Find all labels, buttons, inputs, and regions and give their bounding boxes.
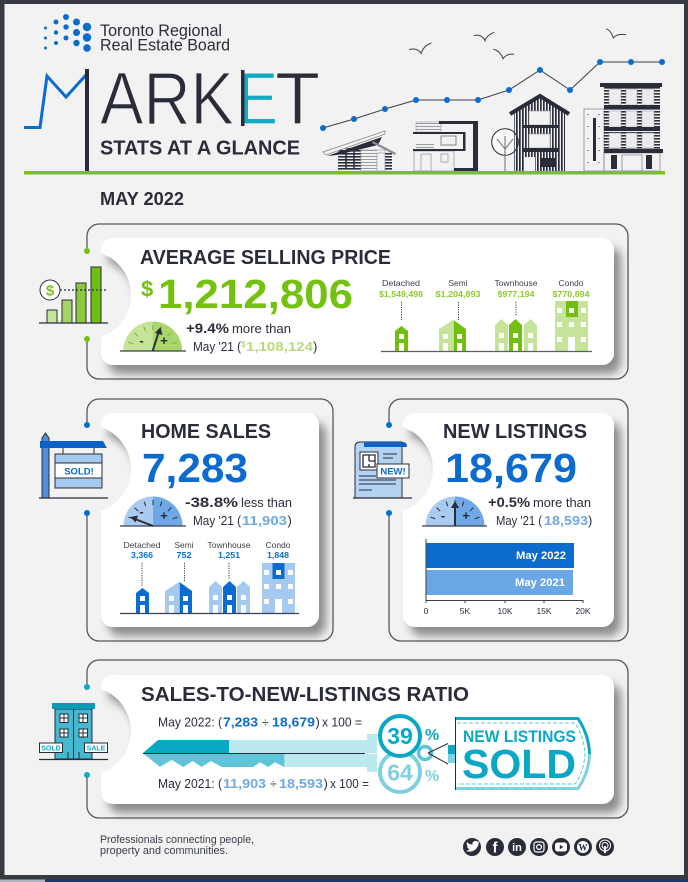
gauge <box>120 322 186 351</box>
formula: May 2022: x 100 = <box>322 714 362 730</box>
rising line chart <box>320 59 665 131</box>
icon: instagram <box>534 842 544 852</box>
change text: May '21 ( <box>193 339 242 354</box>
bar chart: 10K <box>497 606 513 616</box>
white card <box>101 413 319 627</box>
heading: NEW LISTINGS <box>443 421 587 443</box>
icon: wordpress <box>577 841 589 853</box>
panel: average selling price <box>39 224 628 379</box>
icon: building with sold and sale signs <box>39 703 108 760</box>
icon: rising price bars: $ <box>46 282 55 300</box>
title: MARKET: ARK <box>100 57 234 140</box>
icon: youtube <box>555 842 567 852</box>
new listings sold tag <box>428 717 591 790</box>
bar chart: 5K <box>460 606 471 616</box>
gauge: + <box>462 508 470 523</box>
house: modern two storey <box>413 121 478 171</box>
formula: May 2021: May 2021: ( <box>158 776 223 791</box>
formula: May 2022: ) <box>316 714 320 730</box>
white card <box>403 413 614 627</box>
icon: linkedin: in <box>512 842 522 854</box>
bar chart: May 2022 <box>516 550 566 562</box>
title: MARKET <box>24 57 320 174</box>
breakdown by home type: Semi <box>174 540 194 550</box>
bar chart: 20K <box>575 606 591 616</box>
change text: ) <box>588 513 592 528</box>
footer tagline: property and communities. <box>100 845 228 857</box>
icon: wordpress: W <box>578 842 588 852</box>
icon: podcast <box>600 840 610 853</box>
change text: +0.5% <box>488 494 531 510</box>
breakdown by home type: $977,194 <box>498 289 535 299</box>
panel outline <box>87 224 628 379</box>
birds <box>409 29 626 59</box>
connector dots <box>84 684 90 778</box>
breakdown by home type: Condo <box>558 278 584 288</box>
change text <box>185 494 292 528</box>
ratio circles: 39 <box>387 723 413 749</box>
change text <box>488 494 592 528</box>
bar chart: May 2021 <box>515 577 565 589</box>
icon: listing document <box>353 442 412 498</box>
formula: May 2022: May 2022: ( <box>158 714 223 730</box>
gauge: - <box>139 504 144 519</box>
heading: SALES-TO-NEW-LISTINGS RATIO <box>141 684 469 706</box>
panel: new listings <box>353 399 628 641</box>
new listings sold tag: SOLD <box>462 741 576 787</box>
gauge <box>422 496 487 526</box>
change text: more than <box>232 321 291 336</box>
ratio circles: 64 <box>387 760 413 786</box>
white card <box>101 238 614 365</box>
green ground line <box>24 171 665 174</box>
new listings sold tag: NEW LISTINGS <box>463 727 576 746</box>
breakdown by home type: 1,848 <box>267 550 289 560</box>
change text: +9.4% <box>186 320 230 336</box>
breakdown by home type <box>120 540 299 614</box>
house: slanted roof bungalow <box>323 131 396 171</box>
breakdown by home type <box>379 278 592 352</box>
breakdown by home type: Townhouse <box>494 278 538 288</box>
breakdown by home type: Semi <box>448 278 468 288</box>
change text: 11,903 <box>242 514 287 528</box>
icon: key bar graphic <box>143 734 377 772</box>
change text: -38.8% <box>185 494 239 510</box>
change text: ) <box>288 513 292 528</box>
change text: 1,108,124 <box>246 340 313 354</box>
icon: sold sign <box>39 433 108 498</box>
icon: facebook: f <box>492 840 498 856</box>
formula: May 2022: 18,679 <box>272 714 315 730</box>
breakdown by home type: $770,894 <box>552 289 590 299</box>
breakdown by home type: 1,251 <box>218 550 240 560</box>
ratio circles: % <box>425 727 439 744</box>
subtitle: stats at a glance: STATS AT A GLANCE <box>100 136 300 160</box>
connector dots <box>84 248 90 342</box>
formula: May 2021: ÷ <box>270 777 277 791</box>
change text: May '21 ( <box>193 513 242 528</box>
breakdown by home type: 752 <box>176 550 192 560</box>
formula: May 2022 <box>158 714 362 730</box>
gauge: - <box>441 508 445 523</box>
date heading: MAY 2022 <box>100 189 184 209</box>
breakdown by home type: Condo <box>266 540 291 550</box>
panel: home sales <box>39 399 333 641</box>
breakdown by home type: $1,549,498 <box>379 289 423 299</box>
main number: 7,283 <box>142 445 248 491</box>
icon: sold sign: SOLD! <box>64 466 94 478</box>
change text: $ <box>241 340 246 349</box>
change text: more than <box>533 495 591 510</box>
main price: $ <box>141 276 153 302</box>
breakdown by home type: Townhouse <box>208 540 251 550</box>
connector dots <box>386 422 392 516</box>
panel outline <box>87 660 628 818</box>
house: striped gable <box>510 96 569 171</box>
ratio circles <box>380 716 439 792</box>
footer tagline: Professionals connecting people, <box>100 834 254 846</box>
gauge <box>120 496 186 526</box>
icon: listing document: NEW! <box>380 466 406 478</box>
formula: May 2021: x 100 = <box>330 776 369 791</box>
ratio circles: % <box>425 768 439 785</box>
breakdown by home type: Detached <box>382 278 420 288</box>
bar chart <box>424 539 591 616</box>
gauge: + <box>160 508 168 523</box>
logo: Toronto Regional Real Estate Board: Real Estate Board <box>100 36 230 54</box>
footer tagline <box>100 834 254 857</box>
formula: May 2022: 7,283 <box>223 714 258 730</box>
change text: May '21 ( <box>496 513 543 528</box>
heading: HOME SALES <box>141 421 271 443</box>
apartment building <box>584 83 663 171</box>
bar chart: 15K <box>536 606 552 616</box>
change text: 18,593 <box>544 514 588 528</box>
formula: May 2021 <box>158 776 369 791</box>
gauge: + <box>160 333 168 348</box>
formula: May 2021: 11,903 <box>223 776 266 791</box>
white card <box>101 675 614 804</box>
panel outline <box>389 399 628 641</box>
formula: May 2021: ) <box>324 776 328 791</box>
title: MARKET: T <box>275 57 320 140</box>
heading: AVERAGE SELLING PRICE <box>140 247 391 269</box>
social media icons <box>463 838 614 856</box>
icon: rising price bars <box>39 267 108 323</box>
logo: Toronto Regional Real Estate Board <box>44 14 230 54</box>
icon: building with sold and sale signs: SALE <box>87 746 106 752</box>
main number: 18,679 <box>445 445 577 491</box>
main price: 1,212,806 <box>158 271 353 317</box>
tree <box>492 129 518 171</box>
breakdown by home type: $1,204,893 <box>436 289 481 299</box>
panel outline <box>87 399 333 641</box>
change text <box>186 320 317 354</box>
connector dots <box>84 422 90 516</box>
icon: building with sold and sale signs: SOLD <box>41 746 61 752</box>
breakdown by home type: 3,366 <box>131 550 153 560</box>
formula: May 2021: 18,593 <box>279 776 323 791</box>
breakdown by home type: Detached <box>124 540 161 550</box>
title: MARKET: E <box>238 57 278 140</box>
icon: twitter <box>466 841 480 852</box>
change text: less than <box>241 495 292 510</box>
bar chart: 0 <box>424 606 429 616</box>
panel: sales-to-new-listings ratio <box>39 660 628 818</box>
formula: May 2022: ÷ <box>262 716 269 730</box>
change text: ) <box>313 339 317 354</box>
gauge: - <box>139 333 144 348</box>
logo: Toronto Regional Real Estate Board: Toronto Regional <box>100 22 222 40</box>
